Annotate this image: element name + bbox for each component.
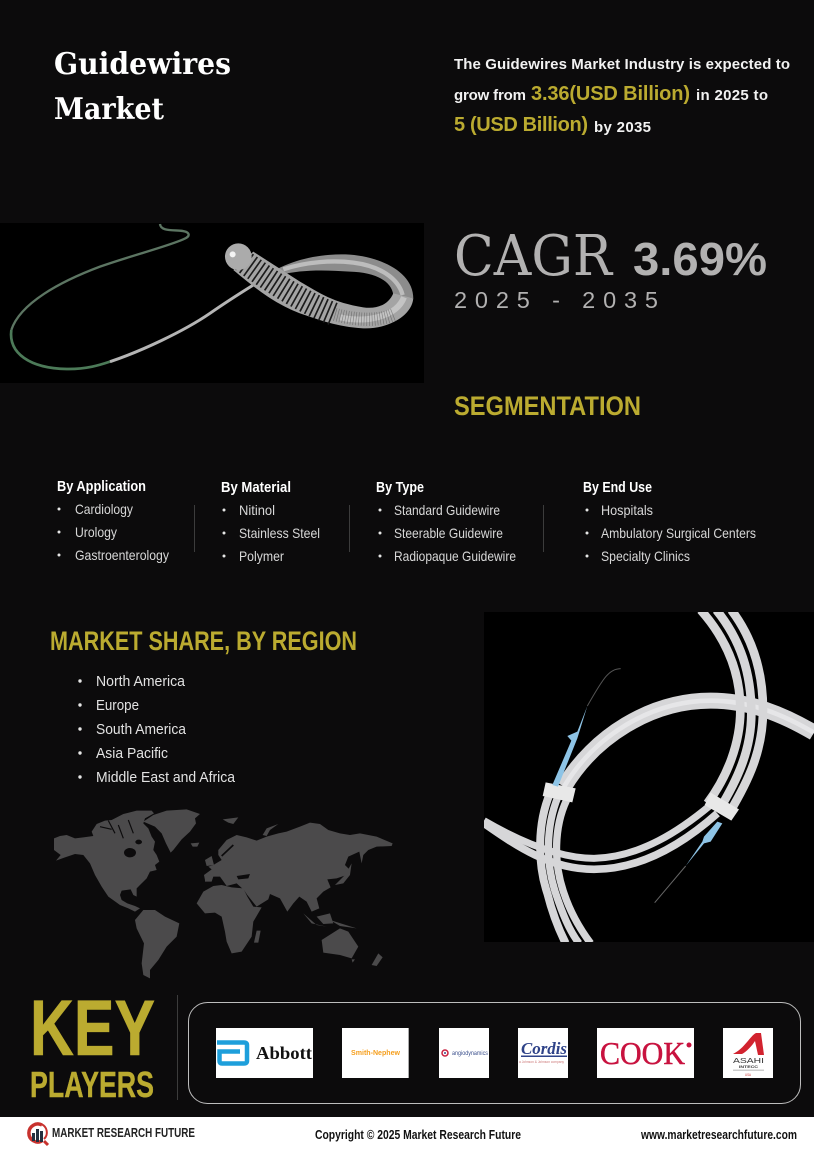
CAGR value: CAGR: [454, 224, 614, 289]
title: Market: [54, 92, 164, 127]
CAGR value: [454, 224, 767, 289]
segment: by end use: [583, 480, 756, 564]
segment: by material: [221, 480, 320, 564]
logo: COOK: [597, 1028, 694, 1078]
region list: North America: [96, 673, 186, 690]
title: Guidewires: [54, 47, 231, 82]
logo: Smith+Nephew: Smith-Nephew: [351, 1048, 400, 1057]
logo: Cordis: Cordis: [521, 1039, 567, 1058]
segment: by type: Radiopaque Guidewire: [394, 548, 516, 564]
logo: Cordis: [518, 1028, 568, 1078]
market forecast text: The Guidewires Market Industry is expected to: [454, 56, 790, 73]
heading: key players: [30, 983, 155, 1105]
segment: by material: Stainless Steel: [239, 525, 320, 541]
heading: segmentation: SEGMENTATION: [454, 391, 641, 421]
logo: Cordis: a Johnson & Johnson company: [519, 1059, 564, 1064]
image: coiled guidewire: [0, 223, 424, 383]
title: [54, 47, 231, 127]
region list: Europe: [96, 697, 139, 714]
panel: company logos: [188, 1002, 800, 1104]
logo: Asahi Intecc: [723, 1028, 773, 1078]
logo: Abbott: [216, 1028, 313, 1078]
tube clips: [543, 782, 739, 821]
region list: Asia Pacific: [96, 745, 168, 762]
segment: by material: Polymer: [239, 548, 284, 564]
icon: market research future logo: [29, 1124, 48, 1145]
segment: by application: [57, 479, 169, 563]
logo: AngioDynamics: angiodynamics: [452, 1051, 488, 1057]
CAGR value: 3.69%: [633, 233, 767, 285]
blue tips and wire ends: [552, 669, 722, 903]
segment: by type: Steerable Guidewire: [394, 525, 503, 541]
segment: by end use: Ambulatory Surgical Centers: [601, 525, 756, 541]
world map: [54, 809, 393, 978]
segment: by application: By Application: [57, 479, 146, 495]
market forecast text: 3.36(USD Billion): [531, 83, 690, 105]
segment: by material: Nitinol: [239, 502, 275, 518]
segment: by material: By Material: [221, 480, 291, 496]
heading: key players: KEY: [30, 983, 155, 1072]
footer: Copyright © 2025 Market Research Future: [315, 1128, 521, 1142]
segment: by application: Gastroenterology: [75, 547, 169, 563]
market forecast text: by 2035: [594, 119, 651, 136]
segment: by end use: By End Use: [583, 480, 652, 496]
logo: COOK: COOK: [600, 1035, 685, 1071]
logo: Asahi Intecc: ASAHI: [733, 1058, 764, 1065]
segment: by type: Standard Guidewire: [394, 502, 500, 518]
logo: AngioDynamics: [439, 1028, 489, 1078]
logo: Smith+Nephew: [342, 1028, 409, 1078]
market forecast text: 5 (USD Billion): [454, 114, 588, 136]
region list: [78, 673, 236, 786]
segment: by type: By Type: [376, 480, 424, 496]
logo: Asahi Intecc: USA: [745, 1073, 752, 1077]
logo: Asahi Intecc: INTECC: [739, 1065, 759, 1069]
logo: Abbott: Abbott: [256, 1043, 312, 1063]
heading: market share by region: MARKET SHARE, BY REGION: [50, 626, 357, 656]
segment: by application: Urology: [75, 524, 117, 540]
heading: key players: PLAYERS: [30, 1064, 154, 1105]
market forecast text: in 2025 to: [696, 87, 768, 104]
CAGR period: 2025 - 2035: [454, 287, 658, 313]
region list: Middle East and Africa: [96, 769, 236, 786]
segment: by application: Cardiology: [75, 501, 133, 517]
market forecast text: [454, 56, 790, 136]
market forecast text: grow from: [454, 87, 526, 104]
segment: by end use: Hospitals: [601, 502, 653, 518]
segment: by end use: Specialty Clinics: [601, 548, 690, 564]
region list: South America: [96, 721, 187, 738]
image: catheter guidewire coils: [484, 610, 814, 943]
footer: [0, 1117, 814, 1150]
segment: by type: [376, 480, 516, 564]
footer: MARKET RESEARCH FUTURE: [52, 1126, 195, 1140]
